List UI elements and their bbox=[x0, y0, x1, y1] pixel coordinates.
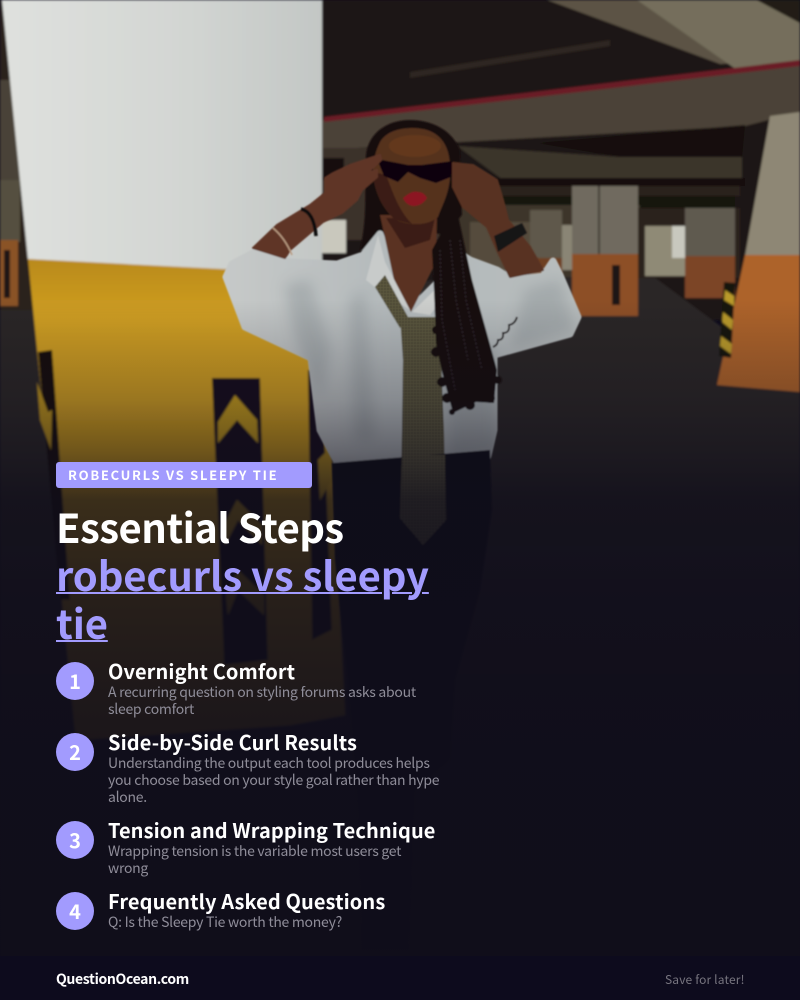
step 2 text: you choose based on your style goal rather than hype bbox=[108, 770, 439, 790]
step 4 number: 4 bbox=[69, 896, 81, 925]
step 2 number: 2 bbox=[69, 737, 81, 766]
step 2 number bbox=[56, 733, 94, 771]
model: forehead highlight bbox=[389, 135, 441, 157]
model: shirt bbox=[226, 234, 578, 462]
step 4 heading: Frequently Asked Questions bbox=[108, 886, 385, 915]
model: collar bbox=[366, 235, 445, 315]
badge bbox=[56, 462, 312, 488]
step 4 number bbox=[56, 892, 94, 930]
model: trousers bbox=[332, 450, 492, 950]
model: face bbox=[373, 128, 450, 224]
model: tie bbox=[375, 275, 446, 545]
step 1 text bbox=[108, 682, 416, 719]
step 3 number bbox=[56, 821, 94, 859]
white and yellow pillar bbox=[2, 0, 345, 740]
background photo: parking garage with model bbox=[0, 0, 800, 740]
badge text: ROBECURLS VS SLEEPY TIE bbox=[68, 465, 278, 484]
model: lips bbox=[403, 192, 427, 206]
step 1 text: A recurring question on styling forums asks about bbox=[108, 682, 416, 702]
step 1 number: 1 bbox=[69, 666, 81, 695]
model: sunglasses bbox=[377, 159, 453, 183]
model: neck and chest bbox=[380, 215, 437, 312]
step 2 text: alone. bbox=[108, 787, 147, 807]
model: tie lower blade over trousers bbox=[400, 455, 446, 545]
step 3 heading: Tension and Wrapping Technique bbox=[108, 815, 436, 844]
model: wrist bands bbox=[273, 209, 527, 255]
footer brand: QuestionOcean.com bbox=[56, 969, 189, 989]
step 3 number: 3 bbox=[69, 825, 81, 854]
step 3 text: wrong bbox=[108, 858, 148, 878]
title: tie bbox=[56, 593, 108, 651]
step 2 heading: Side-by-Side Curl Results bbox=[108, 727, 357, 756]
model: neck shadow bbox=[386, 218, 435, 248]
model: hair back bbox=[360, 120, 462, 250]
step 2 text: Understanding the output each tool produces helps bbox=[108, 753, 430, 773]
model: right arm and hand bbox=[453, 163, 543, 277]
title: Essential Steps bbox=[56, 497, 344, 555]
garage ceiling and beams bbox=[0, 0, 800, 320]
step 2 text bbox=[108, 753, 439, 807]
distant pillars bbox=[322, 186, 740, 316]
title bbox=[56, 497, 429, 651]
step 1 text: sleep comfort bbox=[108, 699, 194, 719]
footer bar bbox=[0, 956, 800, 1000]
floor bbox=[0, 274, 800, 1000]
model: front braids and curls bbox=[431, 195, 517, 415]
right pillar bbox=[717, 112, 800, 392]
title: robecurls vs sleepy bbox=[56, 545, 429, 603]
step 4 text: Q: Is the Sleepy Tie worth the money? bbox=[108, 912, 342, 932]
step 3 text bbox=[108, 841, 402, 878]
step 1 heading: Overnight Comfort bbox=[108, 656, 295, 685]
model: face shadow bbox=[373, 172, 412, 224]
model: left arm and hand bbox=[253, 155, 381, 258]
step 3 text: Wrapping tension is the variable most users get bbox=[108, 841, 401, 861]
far left garage sliver bbox=[0, 0, 40, 310]
step 1 number bbox=[56, 662, 94, 700]
model: shirt shadows bbox=[285, 280, 575, 460]
footer save note: Save for later! bbox=[665, 971, 745, 988]
